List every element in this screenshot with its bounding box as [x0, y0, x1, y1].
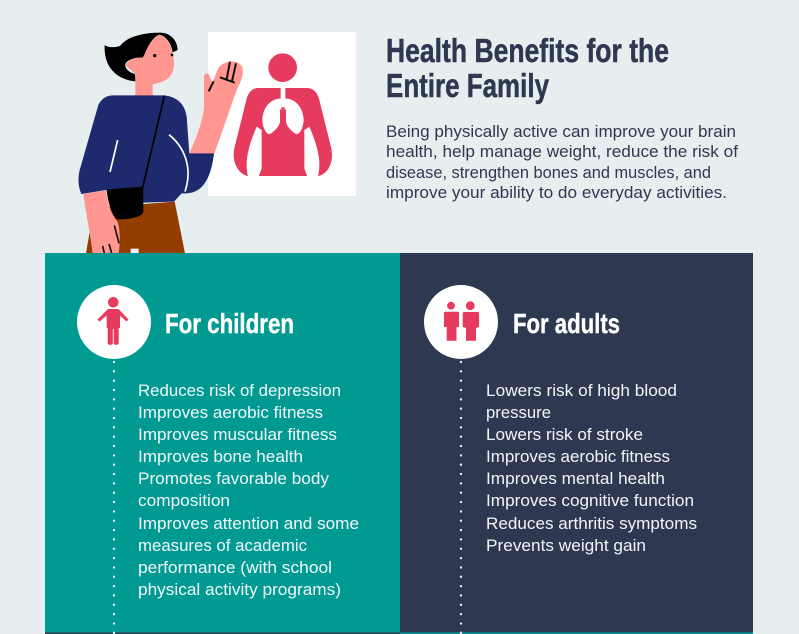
panel: for adults [400, 253, 753, 634]
dotted connector: adults [460, 362, 462, 634]
list: children benefits [138, 382, 359, 599]
list: adult benefits: Reduces arthritis symptoms [486, 515, 697, 533]
title: Health Benefits for the [386, 32, 669, 69]
icon: adults [424, 285, 498, 359]
list: children benefits: Reduces risk of depression [138, 382, 341, 400]
title [386, 32, 669, 104]
list: adult benefits: Improves cognitive function [486, 492, 694, 510]
list: children benefits: Improves bone health [138, 448, 303, 466]
panel: for children [45, 253, 400, 634]
list: children benefits: Improves aerobic fitness [138, 404, 323, 422]
list: children benefits: physical activity programs) [138, 581, 341, 599]
list: adult benefits [486, 382, 697, 555]
intro paragraph: health, help manage weight, reduce the risk of [386, 143, 738, 161]
icon: child [77, 285, 151, 359]
list: children benefits: performance (with school [138, 559, 332, 577]
dotted connector: children [113, 362, 115, 634]
list: children benefits: Improves attention and some [138, 515, 359, 533]
list: children benefits: Promotes favorable body [138, 470, 330, 488]
title: Entire Family [386, 67, 550, 104]
intro paragraph: disease, strengthen bones and muscles, and [386, 164, 711, 182]
intro paragraph: Being physically active can improve your brain [386, 123, 736, 141]
heading: for children: For children [165, 308, 294, 339]
illustration: woman pointing at body chart [78, 32, 356, 253]
list: adult benefits: Improves mental health [486, 470, 665, 488]
list: adult benefits: Prevents weight gain [486, 537, 646, 555]
intro paragraph: improve your ability to do everyday activities. [386, 184, 727, 202]
list: adult benefits: Lowers risk of high blood [486, 382, 677, 400]
list: adult benefits: Improves aerobic fitness [486, 448, 670, 466]
list: children benefits: Improves muscular fitness [138, 426, 337, 444]
list: adult benefits: Lowers risk of stroke [486, 426, 643, 444]
woman figure [78, 33, 243, 253]
heading: for adults: For adults [513, 308, 620, 339]
chart card with lungs icon [208, 32, 356, 196]
intro paragraph [386, 123, 738, 202]
list: children benefits: composition [138, 492, 230, 510]
list: children benefits: measures of academic [138, 537, 307, 555]
list: adult benefits: pressure [486, 404, 551, 422]
